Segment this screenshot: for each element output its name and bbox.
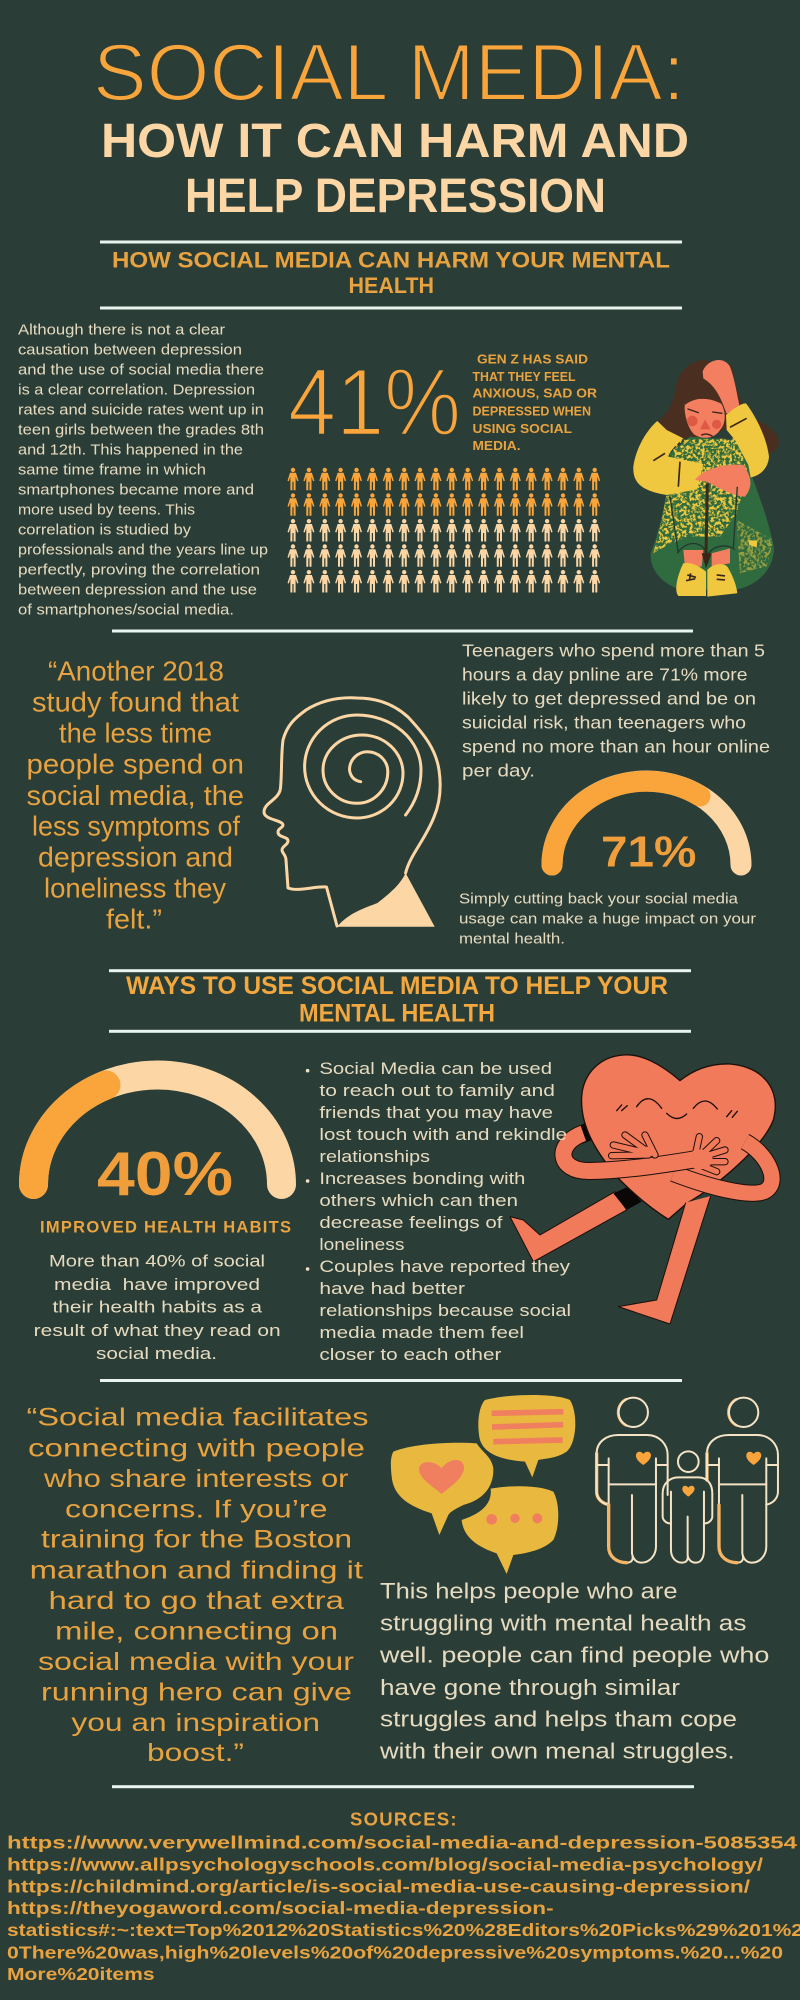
text block: correlation: and 12th. This happened in the <box>18 441 243 458</box>
text block: 40 percent: result of what they read on <box>34 1322 281 1340</box>
quote: facilitates connecting: hard to go that extra <box>48 1587 344 1615</box>
quote: facilitates connecting: who share interests or <box>43 1465 348 1493</box>
gauge: 71% <box>552 781 741 877</box>
quote: 2018 study: depression and <box>38 842 233 873</box>
bullet list: decrease feelings of <box>319 1214 503 1232</box>
quote: facilitates connecting: concerns. If you’re <box>65 1496 328 1524</box>
text block: correlation: of smartphones/social media. <box>18 601 234 618</box>
bullet list: Increases bonding with <box>319 1170 525 1188</box>
quote: facilitates connecting: social media with your <box>38 1648 354 1676</box>
text block: correlation: rates and suicide rates went up in <box>18 401 264 418</box>
quote: facilitates connecting: boost.” <box>147 1739 244 1767</box>
text block: teenagers: likely to get depressed and be on <box>462 689 756 709</box>
stat caption: Gen Z: THAT THEY FEEL <box>472 369 576 384</box>
text block: this helps <box>379 1578 769 1763</box>
child <box>663 1451 712 1563</box>
bullet list: loneliness <box>319 1236 404 1254</box>
text block: this helps: This helps people who are <box>380 1578 678 1603</box>
title: HELP DEPRESSION <box>185 170 606 223</box>
text block: this helps: well. people can find people who <box>379 1643 769 1668</box>
quote: 2018 study: “Another 2018 <box>48 656 224 687</box>
text block: 40 percent: social media. <box>96 1345 217 1363</box>
stat caption: Gen Z <box>472 351 598 453</box>
gauge: 71%: 71% <box>601 828 696 877</box>
pictogram: people <box>288 468 600 592</box>
text block: correlation: and the use of social media there <box>18 361 264 378</box>
quote: facilitates connecting: mile, connecting on <box>55 1617 338 1645</box>
stat caption: Gen Z: DEPRESSED WHEN <box>472 404 591 419</box>
bullet list: media made them feel <box>319 1324 524 1342</box>
sources: https://childmind.org/article/is-social-media-use-causing-depression/ <box>7 1876 750 1896</box>
quote: facilitates connecting <box>26 1404 368 1767</box>
text block: correlation: causation between depression <box>18 341 242 358</box>
stat: 41%: 41% <box>288 349 461 456</box>
quote: 2018 study: felt.” <box>106 904 162 935</box>
text block: cutting back: mental health. <box>459 931 565 947</box>
sources: https://www.verywellmind.com/social-media-and-depression-5085354 <box>7 1832 797 1852</box>
text block: teenagers: spend no more than an hour online <box>462 737 770 757</box>
gauge: 40% <box>34 1075 282 1209</box>
text block: teenagers <box>462 641 770 781</box>
quote: 2018 study: study found that <box>32 687 239 718</box>
label: improved health habits: IMPROVED HEALTH HABITS <box>40 1219 291 1237</box>
text block: correlation: perfectly, proving the correlation <box>18 561 260 578</box>
text block: correlation: Although there is not a clear <box>18 321 225 338</box>
bullet list <box>306 1060 571 1364</box>
text block: teenagers: Teenagers who spend more than 5 <box>462 641 765 661</box>
bullet list: lost touch with and rekindle <box>319 1126 567 1144</box>
parent left <box>597 1398 668 1563</box>
gauge: 40%: 40% <box>97 1140 233 1209</box>
heading: harm: HEALTH <box>348 273 434 298</box>
bullet list: have had better <box>319 1280 466 1298</box>
icon: speech bubbles <box>391 1395 575 1574</box>
parent right <box>707 1398 778 1563</box>
title: SOCIAL MEDIA: <box>93 28 685 118</box>
text block: teenagers: suicidal risk, than teenagers who <box>462 713 746 733</box>
text block: teenagers: per day. <box>462 761 535 781</box>
text block: correlation: professionals and the years line up <box>18 541 268 558</box>
bullet list: Social Media can be used <box>319 1060 552 1078</box>
sources: statistics#:~:text=Top%2012%20Statistics%20%28Editors%20Picks%29%201%2 <box>7 1920 800 1940</box>
text block: correlation: smartphones became more and <box>18 481 254 498</box>
sources: https://theyogaword.com/social-media-depression- <box>7 1898 554 1918</box>
text block: correlation <box>18 321 268 618</box>
quote: 2018 study: people spend on <box>26 749 244 780</box>
quote: facilitates connecting: running hero can give <box>41 1678 352 1706</box>
text block: correlation: between depression and the use <box>18 581 257 598</box>
bullet list: relationships <box>319 1148 430 1166</box>
title <box>93 28 689 223</box>
text block: 40 percent: media have improved <box>54 1276 260 1294</box>
text block: cutting back: Simply cutting back your social media <box>459 891 739 907</box>
text block: correlation: teen girls between the grades 8th <box>18 421 264 438</box>
bullet list: friends that you may have <box>319 1104 553 1122</box>
text block: 40 percent: More than 40% of social <box>49 1253 265 1271</box>
heading: help <box>126 972 668 1028</box>
bullet list: others which can then <box>319 1192 518 1210</box>
text block: correlation: same time frame in which <box>18 461 206 478</box>
text block: correlation: correlation is studied by <box>18 521 192 538</box>
stat caption: Gen Z: ANXIOUS, SAD OR <box>472 386 598 401</box>
quote: facilitates connecting: you an inspiration <box>71 1709 320 1737</box>
quote: facilitates connecting: “Social media facilitates <box>26 1404 368 1432</box>
title: HOW IT CAN HARM AND <box>101 115 689 168</box>
heading: harm: HOW SOCIAL MEDIA CAN HARM YOUR MENTAL <box>112 248 670 272</box>
sources: 0There%20was,high%20levels%20of%20depressive%20symptoms.%20...%20 <box>7 1942 783 1962</box>
bullet list: Couples have reported they <box>319 1258 571 1276</box>
text block: this helps: struggling with mental health as <box>380 1611 746 1636</box>
icon: family <box>597 1398 778 1563</box>
sources: SOURCES: <box>350 1809 457 1830</box>
bullet list: relationships because social <box>319 1302 571 1320</box>
quote: 2018 study: the less time <box>59 718 212 749</box>
quote: 2018 study: social media, the <box>26 780 244 811</box>
bullet list: to reach out to family and <box>319 1082 555 1100</box>
text block: 40 percent: their health habits as a <box>52 1299 263 1317</box>
sources: More%20items <box>7 1964 155 1984</box>
stat caption: Gen Z: MEDIA. <box>472 438 520 453</box>
heading: harm <box>112 248 670 298</box>
sources: https://www.allpsychologyschools.com/blog/social-media-psychology/ <box>7 1855 763 1875</box>
text block: cutting back <box>459 891 756 947</box>
stat caption: Gen Z: GEN Z HAS SAID <box>477 351 588 366</box>
quote: 2018 study: loneliness they <box>44 873 226 904</box>
icon: head with spiral <box>264 698 440 927</box>
text block: 40 percent <box>34 1253 281 1363</box>
icon: sad girl <box>633 360 779 597</box>
heading: help: WAYS TO USE SOCIAL MEDIA TO HELP YOUR <box>126 972 668 1000</box>
text block: teenagers: hours a day pnline are 71% more <box>462 665 748 685</box>
text block: correlation: more used by teens. This <box>18 501 195 518</box>
text block: cutting back: usage can make a huge impact on your <box>459 911 756 927</box>
quote: 2018 study: less symptoms of <box>32 811 240 842</box>
quote: 2018 study <box>26 656 244 935</box>
text block: this helps: have gone through similar <box>380 1675 680 1700</box>
icon: hugging heart <box>510 1055 775 1324</box>
heading: help: MENTAL HEALTH <box>299 1000 495 1028</box>
quote: facilitates connecting: marathon and finding it <box>30 1556 363 1584</box>
stat caption: Gen Z: USING SOCIAL <box>472 421 572 436</box>
quote: facilitates connecting: connecting with people <box>28 1435 365 1463</box>
sources <box>7 1809 800 1984</box>
text block: this helps: with their own menal struggles. <box>379 1738 735 1763</box>
text block: correlation: is a clear correlation. Depression <box>18 381 255 398</box>
quote: facilitates connecting: training for the Boston <box>41 1526 352 1554</box>
text block: this helps: struggles and helps tham cope <box>380 1707 737 1732</box>
bullet list: closer to each other <box>319 1346 502 1364</box>
